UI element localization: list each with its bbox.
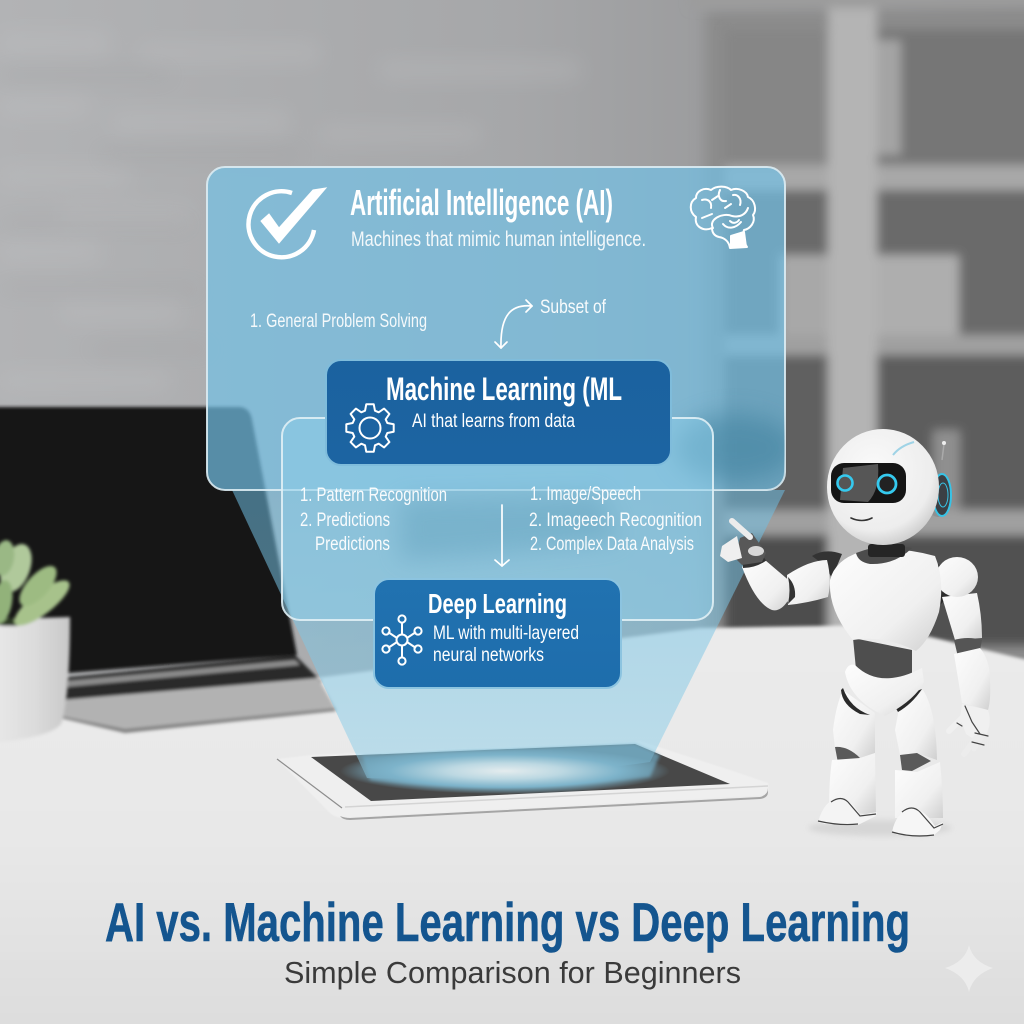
laptop — [0, 407, 336, 733]
robot mouth — [851, 518, 872, 520]
robot shadow — [808, 820, 952, 836]
text: General Problem Solving: 1. General Problem Solving — [250, 311, 427, 332]
tablet — [277, 741, 768, 820]
robot visor — [831, 463, 906, 503]
robot head — [827, 429, 951, 545]
icon: check mark — [248, 188, 326, 257]
hologram beam — [232, 490, 785, 779]
list: deep learning uses: 2. Complex Data Analysis — [530, 534, 694, 555]
list: deep learning uses: 2. Imageech Recognition — [529, 510, 702, 531]
robot eyes — [838, 476, 852, 490]
list: machine learning uses: 2. Predictions — [300, 510, 390, 531]
robot right foot — [892, 807, 943, 835]
tablet screen — [311, 744, 730, 801]
list: machine learning uses — [300, 485, 447, 555]
heading: Artificial Intelligence: Artificial Intelligence (AI) — [350, 182, 613, 223]
text: ML definition: AI that learns from data — [412, 411, 575, 432]
robot right arm — [929, 557, 990, 754]
robot legs — [818, 688, 943, 836]
text: DL definition: ML with multi-layered — [433, 623, 579, 644]
icon: sparkle — [945, 945, 993, 992]
icon: neural network — [382, 615, 422, 665]
list: machine learning uses: 1. Pattern Recognition — [300, 485, 447, 506]
robot left arm — [720, 521, 842, 610]
robot neck — [856, 546, 912, 564]
list: deep learning uses: 1. Image/Speech — [530, 484, 641, 505]
arrow: ML to DL — [495, 505, 509, 566]
arrow: subset of — [495, 300, 532, 348]
icon: brain — [691, 187, 755, 248]
list: machine learning uses: Predictions — [315, 534, 390, 555]
panel: Deep Learning box — [374, 579, 621, 688]
panel: Machine Learning outer — [282, 418, 713, 620]
panel: Deep Learning box: neural networks — [433, 645, 544, 666]
subtitle: Simple Comparison for Beginners — [284, 955, 741, 990]
list: deep learning uses — [529, 484, 702, 555]
tablet screen glow — [340, 744, 670, 794]
shadow inside panel — [400, 495, 620, 560]
plant in pot — [0, 539, 76, 744]
panel: Artificial Intelligence — [207, 167, 795, 490]
robot — [720, 429, 990, 836]
heading: Machine Learning: Machine Learning (ML — [386, 371, 622, 407]
shadow inside panel — [675, 414, 795, 482]
robot left foot — [818, 797, 877, 825]
robot torso — [830, 549, 941, 651]
robot waist — [853, 638, 912, 683]
icon: gear — [346, 404, 394, 452]
heading: Deep Learning: Deep Learning — [428, 588, 567, 619]
text: subset of: Subset of — [540, 297, 607, 318]
panel: Machine Learning box — [326, 360, 671, 465]
desk surface — [0, 625, 1024, 1024]
text: AI definition: Machines that mimic human intelligence. — [351, 228, 646, 251]
robot pelvis — [845, 665, 924, 716]
robot right hand — [949, 704, 990, 754]
blurred bookshelf — [690, 0, 1024, 660]
